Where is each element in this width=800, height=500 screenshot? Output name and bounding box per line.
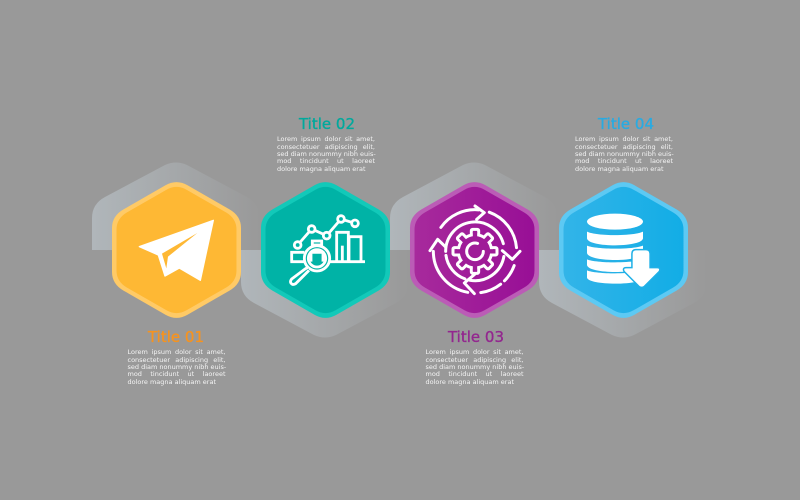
icon: paper plane: [139, 220, 213, 280]
text block: step 1: sed diam nonummy nibh euis-: [128, 363, 226, 371]
text block: step 2: [277, 135, 376, 173]
title: Title 02: Title 02: [299, 115, 355, 133]
text block: step 3: Lorem ipsum dolor sit amet,: [426, 348, 524, 356]
text block: step 3: sed diam nonummy nibh euis-: [426, 363, 524, 371]
text block: step 2: consectetuer adipiscing elit,: [277, 143, 375, 151]
text block: step 3: dolore magna aliquam erat: [426, 378, 514, 386]
text block: step 2: dolore magna aliquam erat: [277, 165, 366, 173]
hexagon: step 2 teal: [261, 182, 390, 318]
text block: step 2: mod tincidunt ut laoreet: [277, 157, 375, 165]
hexagon: step 3 purple: [410, 182, 539, 318]
text block: step 2: sed diam nonummy nibh euis-: [277, 150, 376, 158]
icon: gear with circular arrows: [430, 206, 520, 294]
text block: step 1: dolore magna aliquam erat: [128, 378, 216, 386]
hexagon: step 1 orange: [112, 182, 241, 318]
text block: step 2: Lorem ipsum dolor sit amet,: [277, 135, 375, 143]
icon: chart with magnifier: [290, 216, 365, 284]
title: Title 03: Title 03: [448, 328, 504, 346]
title: Title 04: Title 04: [598, 115, 654, 133]
text block: step 1: consectetuer adipiscing elit,: [128, 356, 226, 364]
text block: step 4: mod tincidunt ut laoreet: [575, 157, 673, 165]
text block: step 4: consectetuer adipiscing elit,: [575, 143, 673, 151]
text block: step 4: [575, 135, 674, 173]
text block: step 3: consectetuer adipiscing elit,: [426, 356, 524, 364]
backing shape: step 2: [241, 250, 409, 338]
text block: step 1: [128, 348, 226, 386]
backing shape: step 4: [539, 250, 707, 338]
text block: step 1: mod tincidunt ut laoreet: [128, 370, 226, 378]
backing shape: step 1: [92, 162, 260, 250]
text block: step 4: Lorem ipsum dolor sit amet,: [575, 135, 673, 143]
title: Title 01: Title 01: [148, 328, 204, 346]
text block: step 3: [426, 348, 524, 386]
text block: step 3: mod tincidunt ut laoreet: [426, 370, 524, 378]
icon: database with download arrow: [587, 214, 659, 287]
hexagon: step 4 blue: [559, 182, 688, 318]
text block: step 4: sed diam nonummy nibh euis-: [575, 150, 674, 158]
text block: step 1: Lorem ipsum dolor sit amet,: [128, 348, 226, 356]
text block: step 4: dolore magna aliquam erat: [575, 165, 664, 173]
backing shape: step 3: [390, 162, 558, 250]
